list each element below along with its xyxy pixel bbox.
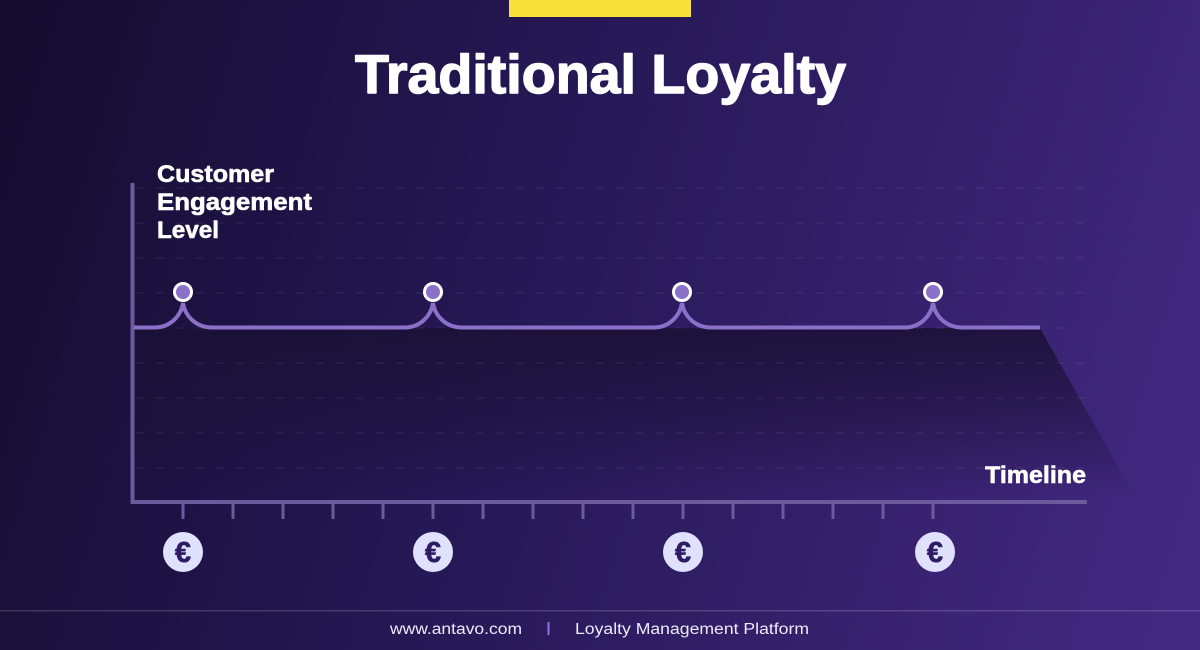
- title: Traditional Loyalty: [355, 43, 846, 105]
- footer: Loyalty Management Platform: [575, 621, 809, 638]
- footer: [0, 610, 1200, 638]
- y-axis label: Engagement: [157, 189, 312, 216]
- euro icons: €: [675, 537, 691, 569]
- yellow top accent bar: [509, 0, 691, 17]
- y-axis label: Customer: [157, 161, 274, 188]
- y-axis label: [157, 161, 312, 244]
- dashed grid lines: [136, 188, 1085, 468]
- y-axis label: Level: [157, 217, 219, 244]
- axes: [132, 183, 1087, 502]
- shadow under engagement line: [134, 328, 1135, 497]
- footer: www.antavo.com: [389, 621, 522, 638]
- timeline ticks: [183, 504, 933, 519]
- euro icons: €: [927, 537, 943, 569]
- engagement point markers: [174, 284, 942, 300]
- chart: customer engagement over timeline: [132, 161, 1135, 519]
- engagement line with spikes: [134, 303, 1040, 328]
- euro icons: €: [175, 537, 191, 569]
- euro icons: [163, 532, 955, 572]
- x-axis label: Timeline: [985, 462, 1086, 489]
- euro icons: €: [425, 537, 441, 569]
